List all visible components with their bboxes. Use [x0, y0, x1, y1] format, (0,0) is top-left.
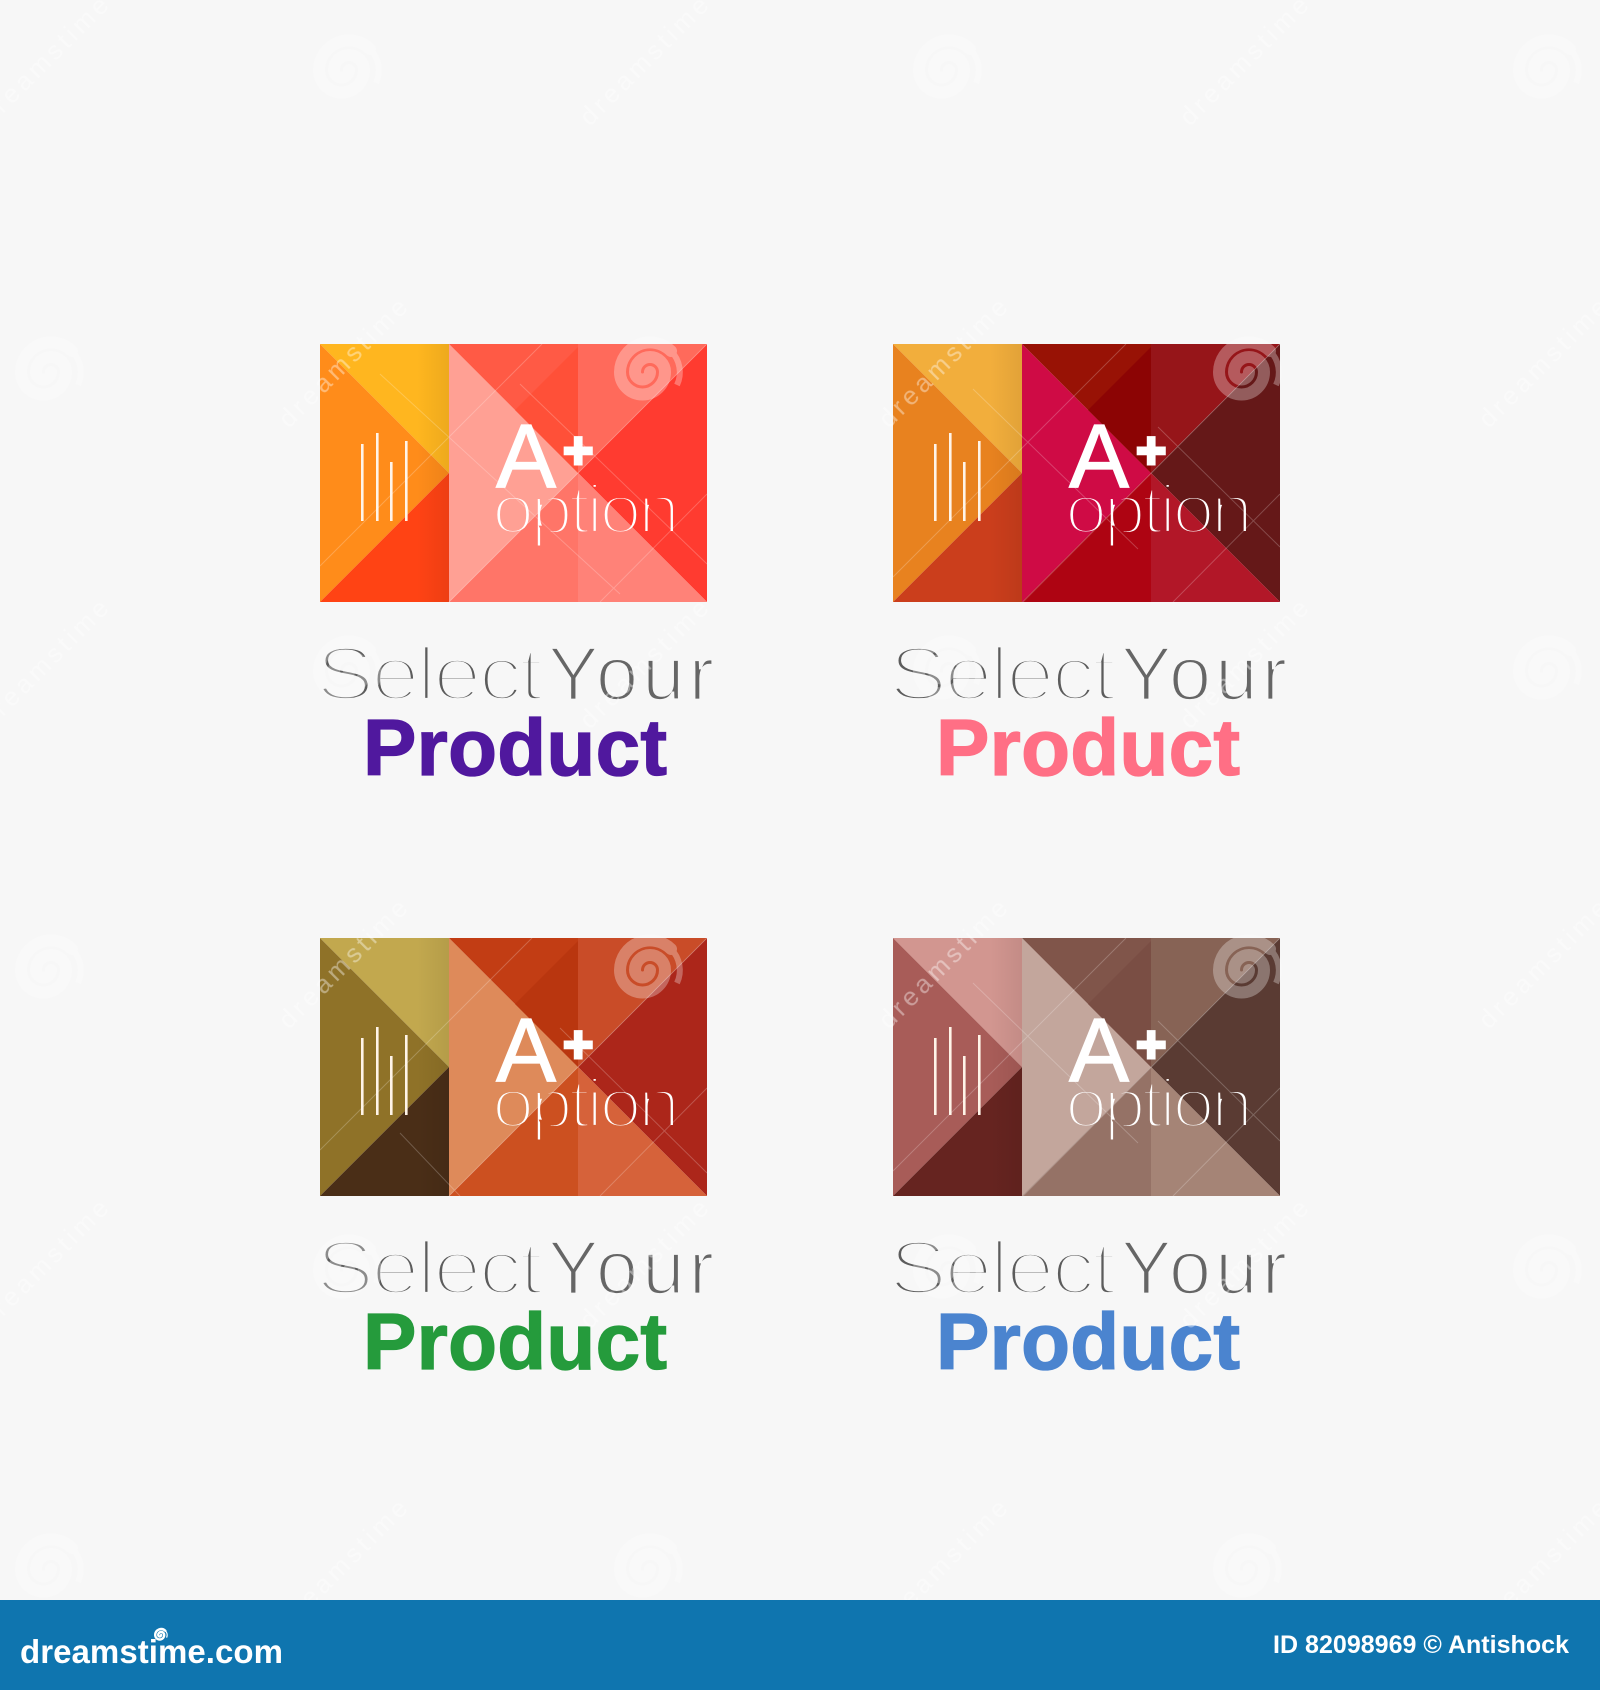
icon: four vertical bars	[361, 1027, 408, 1115]
chart: right folded triangles	[449, 344, 707, 602]
footer logo text: dreamstime.com	[20, 1633, 283, 1670]
heading: Select Your Product earth card: Select	[316, 1226, 544, 1311]
label: A+ option: A	[496, 1001, 556, 1101]
label: A+ option: +	[1136, 1016, 1166, 1074]
heading: Select Your Product crimson card: Your	[1121, 632, 1287, 717]
panel: earth option card	[320, 938, 707, 1196]
watermark text: dreamstime	[872, 893, 1013, 1034]
icon: four vertical bars	[934, 433, 981, 521]
watermark lattice lines over cards	[320, 344, 1280, 1196]
heading: Select Your Product orange card: Select	[316, 632, 544, 717]
panel: orange option card	[320, 344, 707, 602]
heading: Select Your Product earth card: Product	[363, 1297, 667, 1386]
icon: left column triangles	[893, 938, 1022, 1196]
heading: Select Your Product crimson card	[889, 632, 1287, 792]
heading: Select Your Product earth card: Your	[548, 1226, 714, 1311]
label: A+ option: +	[563, 1016, 593, 1074]
label: A+ option	[1065, 407, 1249, 548]
label: A+ option: option	[1065, 471, 1249, 548]
watermark text: dreamstime	[573, 593, 714, 734]
icon: four vertical bars	[361, 433, 408, 521]
heading: Select Your Product orange card	[316, 632, 714, 792]
icon: four vertical bars	[934, 1027, 981, 1115]
label: A+ option: option	[492, 471, 676, 548]
watermark text: dreamstime	[272, 1493, 413, 1634]
icon: footer spiral	[155, 1629, 167, 1640]
panel: rose brown option card	[893, 938, 1280, 1196]
watermark text: dreamstime	[872, 292, 1013, 433]
label: A+ option: option	[492, 1065, 676, 1142]
footer credit: ID 82098969 © Antishock	[1273, 1631, 1569, 1659]
heading: Select Your Product earth card	[316, 1226, 714, 1386]
chart: right folded triangles	[1022, 938, 1280, 1196]
label: A+ option	[492, 407, 676, 548]
watermark text: dreamstime	[573, 1193, 714, 1334]
watermark text: dreamstime	[1173, 593, 1314, 734]
chart: right folded triangles	[449, 938, 707, 1196]
footer bar	[0, 1600, 1600, 1690]
heading: Select Your Product crimson card: Select	[889, 632, 1117, 717]
watermark text: dreamstime	[872, 1493, 1013, 1634]
icon: left column triangles	[320, 938, 449, 1196]
heading: Select Your Product rose card: Product	[936, 1297, 1240, 1386]
label: A+ option	[492, 1001, 676, 1142]
label: A+ option: +	[563, 422, 593, 480]
label: A+ option: A	[496, 407, 556, 507]
panel: crimson option card	[893, 344, 1280, 602]
watermark text: dreamstime	[272, 292, 413, 433]
label: A+ option: A	[1069, 1001, 1129, 1101]
label: A+ option	[1065, 1001, 1249, 1142]
heading: Select Your Product orange card: Your	[548, 632, 714, 717]
heading: Select Your Product crimson card: Product	[936, 703, 1240, 792]
label: A+ option: A	[1069, 407, 1129, 507]
heading: Select Your Product rose card	[889, 1226, 1287, 1386]
icon: left column triangles	[893, 344, 1022, 602]
heading: Select Your Product rose card: Your	[1121, 1226, 1287, 1311]
heading: Select Your Product rose card: Select	[889, 1226, 1117, 1311]
watermark text: dreamstime	[272, 893, 413, 1034]
watermark text: dreamstime	[1173, 1193, 1314, 1334]
label: A+ option: +	[1136, 422, 1166, 480]
chart: right folded triangles	[1022, 344, 1280, 602]
label: A+ option: option	[1065, 1065, 1249, 1142]
icon: left column triangles	[320, 344, 449, 602]
heading: Select Your Product orange card: Product	[363, 703, 667, 792]
